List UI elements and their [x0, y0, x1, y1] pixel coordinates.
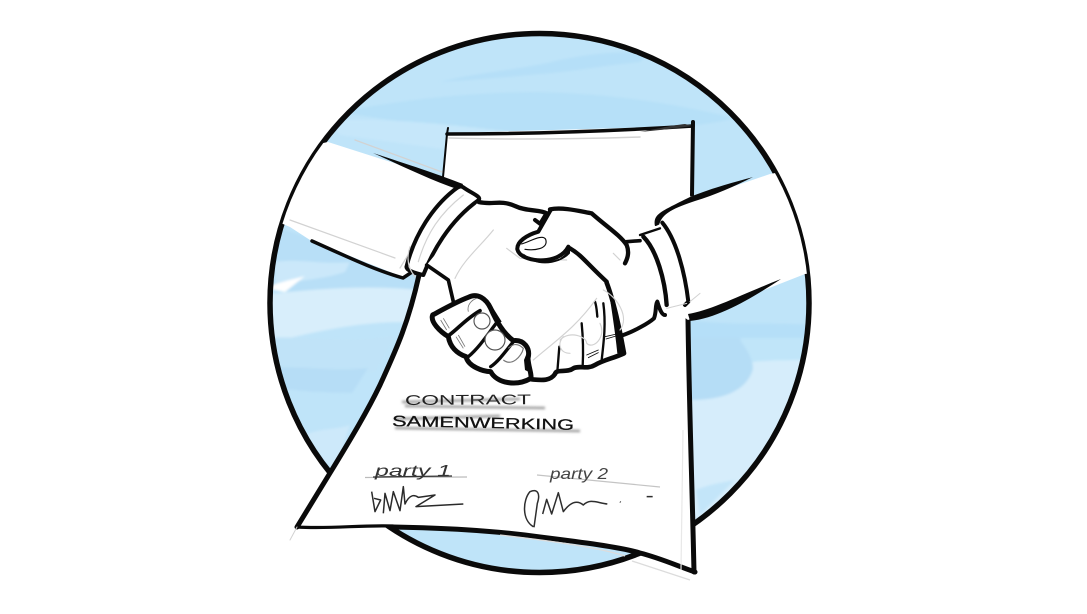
- right hand outline: [532, 209, 665, 380]
- title shading: [394, 399, 580, 431]
- right shirt cuff: [633, 223, 700, 315]
- illustration: handshake over a signed contract: [267, 30, 812, 580]
- word: contract: CONTRACT: [405, 391, 532, 408]
- left shirt cuff: [405, 186, 480, 277]
- clasped hands fill: [427, 202, 660, 380]
- left sleeve: [262, 140, 463, 278]
- signature 2: [525, 491, 653, 527]
- thumb of the right hand: [517, 210, 570, 263]
- contract sheet: [290, 122, 695, 580]
- party 1 signature block: [365, 463, 467, 513]
- left hand outline: [427, 202, 567, 302]
- contract title: [392, 391, 580, 434]
- label: party 1: party 1: [373, 463, 451, 480]
- label: party 2: party 2: [549, 466, 608, 483]
- signature 1: [372, 487, 463, 513]
- word: samenwerking: SAMENWERKING: [392, 413, 574, 434]
- circle outline: [270, 34, 809, 572]
- right sleeve: [654, 173, 807, 321]
- fingers of the left hand: [432, 296, 532, 383]
- handshake: [405, 186, 700, 383]
- blue circle background with watercolour bands: [260, 25, 820, 585]
- party 2 signature block: [525, 466, 660, 527]
